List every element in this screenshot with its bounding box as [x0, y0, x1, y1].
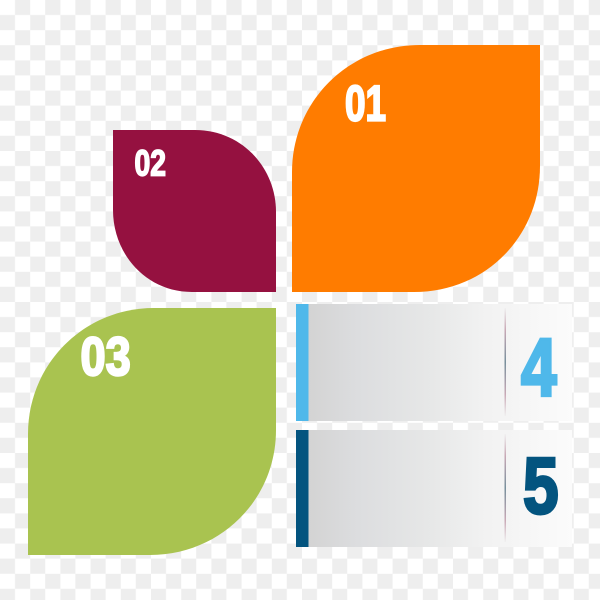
panel body: [308, 430, 506, 547]
number tab: [506, 304, 572, 421]
panel: row 5: [296, 430, 572, 547]
panel: row 4: [296, 304, 572, 421]
colour bar: [296, 430, 308, 547]
number tab: [506, 430, 572, 547]
fold crease: [504, 434, 506, 542]
fold crease: [504, 308, 506, 416]
number 01: 01: [345, 76, 386, 132]
panel body: [308, 304, 506, 421]
panel: petal 03 green: [28, 308, 276, 555]
number 02: 02: [134, 143, 166, 183]
panel: petal 01 orange: [292, 45, 540, 292]
number 03: 03: [80, 326, 131, 387]
panel: petal 02 maroon: [113, 130, 276, 292]
number 5: 5: [523, 443, 559, 531]
number 4: 4: [521, 321, 557, 413]
colour bar: [296, 304, 308, 421]
